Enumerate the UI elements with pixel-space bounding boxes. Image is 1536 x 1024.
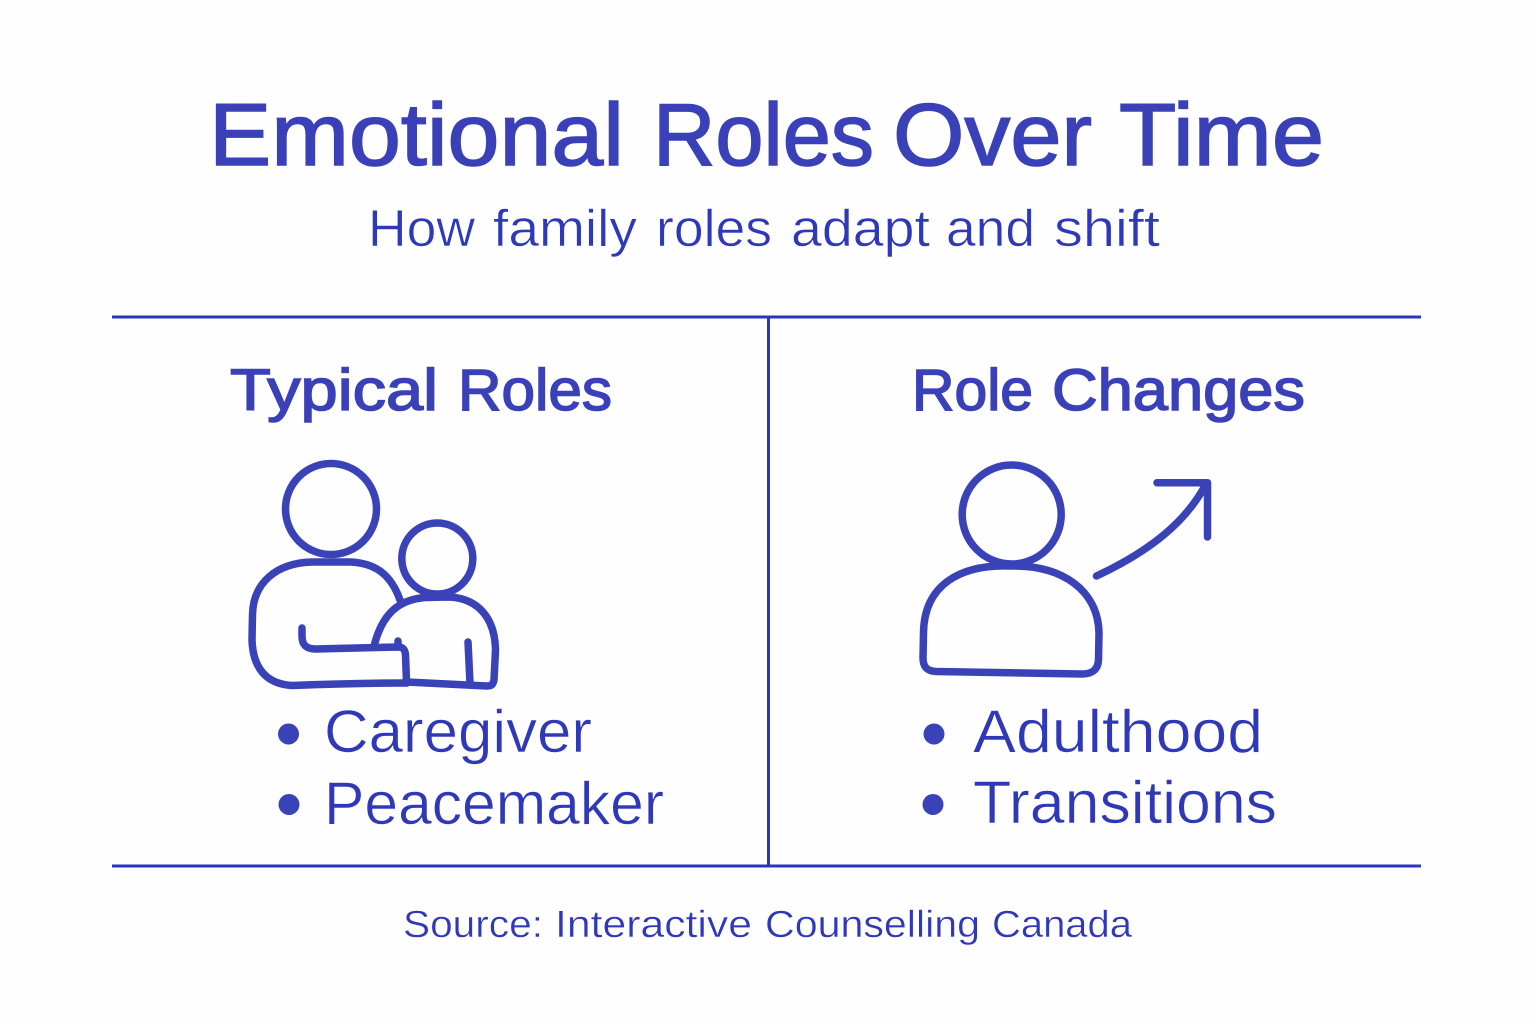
bullet item: transitions: Transitions [973,769,1277,836]
heading: typical roles [230,358,612,423]
subtitle [368,200,1161,258]
source note: Canada [992,904,1133,946]
subtitle: shift [1054,200,1161,258]
icon: adult and child [252,464,496,686]
heading: role changes [912,358,1305,423]
panel: typical roles [230,358,664,837]
bullet item: adulthood: Adulthood [973,698,1263,765]
source note: Interactive [555,904,752,946]
bullet item: peacemaker: Peacemaker [324,770,664,837]
subtitle: adapt [791,200,931,258]
list: role changes [922,698,1277,836]
source note [403,904,1133,946]
heading: typical roles: Typical [230,358,438,423]
heading: role changes: Changes [1052,358,1305,423]
title: Over [893,85,1092,184]
title [209,85,1324,184]
source note: Counselling [765,904,980,946]
subtitle: family [493,200,637,258]
subtitle: How [368,200,475,258]
panel: role changes [912,358,1305,836]
list: typical roles [278,698,664,837]
title: Time [1119,85,1324,184]
bullet item: caregiver: Caregiver [324,698,592,765]
subtitle: and [946,200,1035,258]
heading: typical roles: Roles [458,358,612,423]
source note: Source: [403,904,543,946]
subtitle: roles [656,200,772,258]
title: Emotional [209,85,624,184]
title: Roles [653,85,874,184]
icon: person with rising arrow [923,465,1208,674]
heading: role changes: Role [912,358,1033,423]
